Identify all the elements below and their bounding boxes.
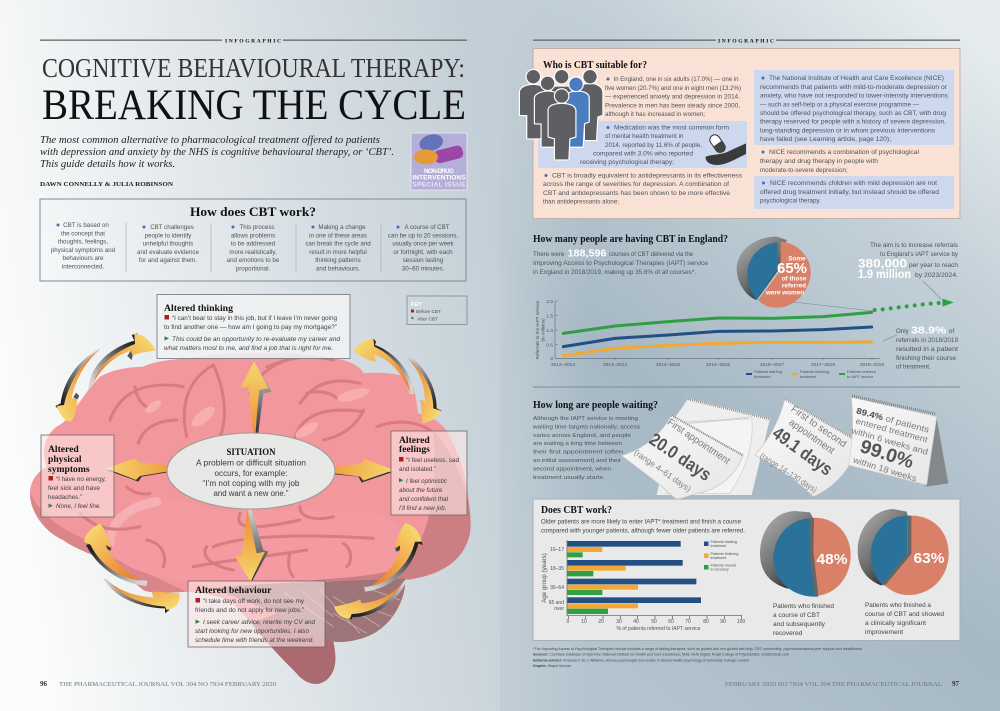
column 2: for and against them. xyxy=(139,257,197,264)
box: altered physical symptoms: None, I feel fine. xyxy=(56,503,101,510)
bar chart: age groups: 90 xyxy=(720,619,726,625)
arrow: thinking to symptoms, lower xyxy=(55,348,100,422)
left section label: INFOGRAPHIC xyxy=(225,38,281,44)
title xyxy=(42,52,466,129)
bar chart: age groups: 20 xyxy=(598,619,604,625)
heading: Who is CBT suitable for? xyxy=(543,60,647,71)
bar chart: age groups xyxy=(541,540,745,632)
description: Older patients are more likely to enter IAPT* treatment and finish a course xyxy=(541,518,741,526)
text: courses delivered: Improving Access to Psychological Therapies (IAPT) service xyxy=(533,260,709,267)
column 2: unhelpful thoughts xyxy=(143,241,193,248)
text: right column: therapy and drug therapy in people with xyxy=(760,158,879,165)
text: right column: moderate-to-severe depression; xyxy=(760,167,848,174)
text: waiting: are waiting a long time between xyxy=(533,441,622,447)
bar chart: age groups: 30 xyxy=(616,619,622,625)
text: right column: should be offered psychological therapy, such as CBT, with drug xyxy=(760,110,947,117)
chart legend xyxy=(746,369,876,379)
right page footer: FEBRUARY 2020 NO 7934 VOL 304 THE PHARMACEUTICAL JOURNAL xyxy=(725,681,942,688)
calendar text: first to second appointment xyxy=(758,404,848,495)
column 4: thinking patterns xyxy=(315,257,361,264)
right page background xyxy=(500,0,1000,711)
text: waiting: Although the IAPT service is meeting xyxy=(533,416,638,422)
calendar text: first appointment: (range 4–61 days) xyxy=(632,447,693,494)
pie caption: improvement: a clinically significant xyxy=(865,620,926,627)
column 5: usually once per week xyxy=(392,241,455,248)
box: altered physical symptoms: feel sick and have xyxy=(48,485,101,492)
box: altered behaviour: schedule time with friends at the weekend. xyxy=(195,637,314,644)
calendar text: first to second appointment: 49.1 days xyxy=(769,423,836,480)
text: right column: NICE recommends a combination of psychological xyxy=(769,149,919,156)
bar chart legend xyxy=(704,540,738,572)
calendar text: first appointment: 20.0 days xyxy=(646,429,715,485)
calendar text: first to second appointment: appointment xyxy=(787,417,836,457)
box: altered behaviour: I seek career advice, rewrite my CV and xyxy=(203,619,316,626)
line chart: referrals: 0 xyxy=(550,356,553,362)
calendar text: treatment within weeks: entered treatment xyxy=(855,416,929,445)
column 5: 30–60 minutes. xyxy=(402,266,444,272)
line chart: referrals: 0.5 xyxy=(546,342,553,348)
chart legend: Patients starting xyxy=(754,369,782,374)
column 3: allows problems xyxy=(231,232,275,239)
bar chart legend: Patients starting xyxy=(710,540,737,544)
right page footer: 97 xyxy=(952,680,960,688)
left page footer: THE PHARMACEUTICAL JOURNAL VOL 304 NO 7934 FEBRUARY 2020 xyxy=(59,681,276,688)
pie: 48% recovered xyxy=(760,511,851,597)
line chart: referrals: 2018–2019 xyxy=(860,362,884,368)
special issue badge xyxy=(411,132,467,190)
column 5: A course of CBT xyxy=(404,224,450,231)
line chart: referrals: 1.0 xyxy=(546,328,553,334)
callout: referral aim: 1.9 million xyxy=(858,269,911,281)
callout: 38.9 percent: 38.9% xyxy=(911,324,947,336)
line chart: referrals: 2015–2016 xyxy=(706,362,730,368)
text: left column: receiving psychological therapy; xyxy=(580,159,674,166)
box: altered thinking: This could be an opportunity to re-evaluate my career and xyxy=(172,336,341,343)
pie: 65% referred were women: were women xyxy=(765,289,804,296)
box: altered thinking: Altered thinking xyxy=(164,303,233,314)
text: left column: Prevalence in men has been steady since 2000, xyxy=(605,102,740,109)
bar chart: age groups: over xyxy=(554,606,564,612)
heading: how long waiting: How long are people waiting? xyxy=(533,400,658,411)
column 4: can break the cycle and xyxy=(305,241,371,248)
bar chart: age groups: 60 xyxy=(668,619,674,625)
chart legend: treatment xyxy=(754,374,771,379)
box: altered feelings: and confident that xyxy=(399,496,448,503)
text: waiting xyxy=(532,416,640,481)
text: left column: CBT is broadly equivalent to antidepressants in its effectiveness xyxy=(552,172,742,180)
left page footer: 96 xyxy=(40,680,48,688)
arrow: symptoms to behaviour, lower xyxy=(103,578,180,613)
text: right column: The National Institute of Health and Care Excellence (NICE) xyxy=(769,75,944,82)
bar chart: age groups: 100 xyxy=(737,619,745,625)
column 3: to be addressed xyxy=(231,241,276,248)
key xyxy=(407,296,467,324)
column 3: This process xyxy=(239,224,275,231)
situation ellipse xyxy=(167,433,335,509)
line chart: referrals: Referrals to the IAPT service xyxy=(535,300,540,359)
column 1: the concept that xyxy=(61,230,105,237)
arrow: left xyxy=(106,458,193,482)
bar chart: age groups: 10 xyxy=(581,619,587,625)
footnotes: Graphic: Wayne McLean xyxy=(533,664,571,668)
column 3: proportional. xyxy=(236,266,270,272)
text: right column: recommends that patients with mild-to-moderate depression or xyxy=(760,84,947,91)
box: altered feelings: Altered xyxy=(399,435,430,446)
calendar text: treatment within weeks: within 6 weeks and xyxy=(849,425,929,457)
text: right column: anxiety, who have not responded to lower-intensity interventions xyxy=(760,93,948,100)
special issue badge: SPECIAL ISSUE xyxy=(412,182,466,188)
box: altered thinking: “I can’t bear to stay in this job, but if I leave I’m never going xyxy=(172,315,338,322)
authors: DAWN CONNELLY & JULIA ROBINSON xyxy=(40,181,173,188)
column 1 xyxy=(51,222,116,270)
box: altered feelings: “I feel useless, sad xyxy=(406,457,460,464)
line chart: referrals: 2014–2015 xyxy=(656,362,680,368)
text: courses delivered: There were xyxy=(533,251,565,258)
line chart: referrals xyxy=(535,281,954,368)
intro text: with depression and anxiety by the NHS is cognitive behavioural therapy, or ‘CBT’. xyxy=(40,147,394,158)
column 2 xyxy=(137,224,200,264)
description xyxy=(541,518,745,534)
text: waiting: second appointment, when xyxy=(533,466,611,472)
bar chart legend: Patients finishing xyxy=(710,552,738,556)
box: altered physical symptoms: physical xyxy=(48,454,82,465)
callout: 38.9 percent: resulted in a patient xyxy=(896,346,958,353)
pie value: 63%: 63% xyxy=(914,550,944,567)
box: altered feelings: and isolated.” xyxy=(399,466,436,473)
text: courses delivered xyxy=(533,248,709,276)
arrow: behaviour to feelings, lower xyxy=(334,578,407,619)
footnotes: Sources: Cochrane Database of Syst Rev; National Institute for Health and Care Excellence; NHS; NHS Digital; Royal College of Psychiatrists; Shutterstock.com xyxy=(533,653,789,657)
column 5: can be up to 20 sessions, xyxy=(388,232,458,239)
text: waiting: varies across England, and people xyxy=(533,433,631,439)
footnotes: Editorial adviser: Amanda C de C Williams, clinical psychologist and reader in clinical health psychology at University College London xyxy=(533,658,749,662)
arrow: thinking to symptoms, upper xyxy=(88,333,156,389)
pie: 63% improved xyxy=(858,509,949,595)
column 2: and evaluate evidence xyxy=(137,249,200,256)
situation ellipse: occurs, for example: xyxy=(214,469,288,478)
text: right column: NICE recommends children with mild depression are not xyxy=(770,180,937,187)
text: right column: offered drug treatment initially, but instead should be offered xyxy=(760,189,940,196)
calendar pages xyxy=(622,396,948,500)
text: left column: Medication was the most common form xyxy=(614,124,729,132)
callout: 38.9 percent xyxy=(896,324,959,370)
arrow: behaviour to feelings, upper xyxy=(364,523,423,592)
bar chart: age groups: 0 xyxy=(567,619,570,625)
column 4: Making a change xyxy=(318,224,366,231)
callout: referral aim: to England’s IAPT service by xyxy=(880,251,959,258)
arrow: symptoms to behaviour, upper xyxy=(84,523,147,586)
callout: 38.9 percent: of treatment. xyxy=(896,364,931,370)
column 3: more realistically, xyxy=(229,249,277,256)
intro text: The most common alternative to pharmacological treatment offered to patients xyxy=(40,135,380,146)
special issue badge: INTERVENTIONS xyxy=(412,174,466,182)
key: KEY xyxy=(411,302,422,308)
panel: does CBT work xyxy=(533,499,960,640)
front page 2 xyxy=(755,398,860,497)
bar chart: age groups: 50 xyxy=(651,619,657,625)
callout: 38.9 percent: finishing their course xyxy=(896,355,957,362)
calendar text: treatment within weeks xyxy=(849,406,930,484)
calendar text: treatment within weeks: within 18 weeks xyxy=(851,454,918,484)
pie caption: improvement xyxy=(865,602,944,636)
series: patients referred xyxy=(563,312,872,333)
text: right column: have failed (see Learning article, page 120); xyxy=(760,136,891,143)
column 1: behaviours are xyxy=(63,255,104,262)
bar chart legend: Patients moved xyxy=(710,564,736,568)
box: altered thinking: what matters most to me, and find a job that is right for me. xyxy=(164,345,333,352)
bar chart: age groups: Age group (years) xyxy=(541,553,548,603)
column 1: physical symptoms and xyxy=(51,247,116,254)
calendar text: first to second appointment: First to second xyxy=(789,404,848,450)
column 2: people to identify xyxy=(145,232,192,239)
bar chart legend: treatment xyxy=(710,544,726,548)
pie caption: recovered: Patients who finished xyxy=(773,603,834,610)
box: altered physical symptoms: symptoms xyxy=(48,464,90,475)
pie: 65% referred were women: 65% xyxy=(777,260,807,277)
title: COGNITIVE BEHAVIOURAL THERAPY: xyxy=(42,52,465,83)
icon: hand with pill xyxy=(706,133,746,165)
column 3: and emotions to be xyxy=(227,257,280,264)
left page background xyxy=(0,0,500,711)
arrows: upper right cycle xyxy=(353,338,442,423)
text: courses delivered: in England in 2018/2019, making up 35.6% of all courses*. xyxy=(533,269,696,276)
text: left column: than antidepressants alone; xyxy=(543,198,619,206)
footnotes xyxy=(533,647,862,668)
arrow: down xyxy=(235,508,268,582)
box: altered behaviour: start looking for new opportunities. I also xyxy=(195,628,310,635)
heading: Does CBT work? xyxy=(541,505,612,516)
target projection dotted arrow xyxy=(873,299,954,312)
bar chart: age groups: 36–64 xyxy=(550,585,564,591)
box: altered feelings xyxy=(391,431,467,515)
text: left column: CBT and antidepressants has been shown to be more effective xyxy=(543,190,731,197)
pie: 65% referred were women: referred xyxy=(782,282,806,289)
text: waiting: an initial assessment) and their xyxy=(533,458,621,464)
pie value: 48%: 48% xyxy=(816,551,848,568)
calendar text: first to second appointment: (range 14–130 days) xyxy=(758,450,819,495)
arrow: feelings to thinking, lower xyxy=(405,353,442,423)
box: altered thinking xyxy=(157,294,350,358)
column 1: thoughts, feelings, xyxy=(58,239,108,246)
arrow: feelings to thinking, upper xyxy=(353,338,414,394)
box: altered feelings: feelings xyxy=(399,444,430,455)
text: left column: five women (20.7%) and one in eight men (13.2%) xyxy=(605,85,741,92)
right section label: INFOGRAPHIC xyxy=(718,38,774,44)
callout: 38.9 percent: of xyxy=(949,328,954,335)
pie: 65% referred were women: Some xyxy=(788,256,806,263)
pie caption: recovered xyxy=(773,603,834,637)
footnotes: *The Improving Access to Psychological Therapies service includes a range of talking therapies, such as guided and non-guided self-help, CBT, counselling, psychoeducational peer support and mindfulness xyxy=(533,647,862,651)
situation ellipse: A problem or difficult situation xyxy=(196,458,306,468)
column 1: interconnected. xyxy=(62,264,104,270)
situation ellipse: SITUATION xyxy=(226,447,276,457)
text: left column: In England, one in six adults (17.0%) — one in xyxy=(614,76,739,83)
column 5: session lasting xyxy=(403,257,444,264)
box: altered thinking: to find another one — how am I going to pay my mortgage?” xyxy=(164,324,337,331)
calendar text: first appointment: First appointment xyxy=(665,417,732,467)
text: left column: although it has increased in women; xyxy=(605,111,705,118)
text: left column: compared with 3.0% who reported xyxy=(593,150,694,158)
text: left column: across the range of severities for depression. A combination of xyxy=(543,181,729,188)
box: altered behaviour: Altered behaviour xyxy=(195,585,272,596)
bar chart: age groups: 18–35 xyxy=(550,566,564,572)
desk calendar xyxy=(917,418,948,487)
box: altered physical symptoms xyxy=(41,435,114,517)
bar chart: age groups: 80 xyxy=(703,619,709,625)
arrows: situation to outcomes xyxy=(106,362,394,582)
text: left column: of mental health treatment in xyxy=(605,133,684,140)
pie: 65% referred were women xyxy=(737,237,811,308)
text: right column: psychological therapy. xyxy=(760,198,821,204)
bar chart: age groups: 40 xyxy=(633,619,639,625)
chart legend: to IAPT service xyxy=(847,374,873,379)
pie caption: recovered: and subsequently xyxy=(773,621,826,628)
pie caption: improvement: improvement xyxy=(865,629,903,636)
box: altered physical symptoms: headaches.” xyxy=(48,494,82,501)
arrow: up xyxy=(240,362,272,440)
series: patients finishing xyxy=(563,342,872,356)
bar chart: age groups: 70 xyxy=(685,619,691,625)
bar chart: age groups: 16–17 xyxy=(550,547,564,553)
box: altered behaviour: friends and do not apply for new jobs.” xyxy=(195,607,304,614)
column 5 xyxy=(388,224,458,272)
line chart: referrals: 1.5 xyxy=(546,314,553,320)
text: waiting: their first appointment (often xyxy=(533,450,623,456)
column 4: and behaviours. xyxy=(316,266,360,272)
column 4: result in more helpful xyxy=(309,249,367,256)
line chart: referrals: 2.0 xyxy=(546,299,553,305)
calendar text: treatment within weeks: 99.0% xyxy=(857,436,916,473)
pie caption: improvement: Patients who finished a xyxy=(865,602,931,609)
column 1: CBT is based on xyxy=(63,222,109,229)
column 2: CBT challenges xyxy=(150,224,194,231)
callout: referral aim: 380,000 xyxy=(858,258,907,270)
special issue badge: NON-DRUG xyxy=(424,168,454,175)
column 4: in one of these areas xyxy=(309,232,367,239)
box: altered behaviour: “I take days off work, do not see my xyxy=(203,598,305,605)
bar chart: age groups: 65 and xyxy=(549,600,564,606)
box: altered physical symptoms: “I have no energy, xyxy=(56,476,106,483)
column 5: or fortnight, with each xyxy=(393,249,453,256)
callout: referral aim xyxy=(858,242,959,281)
box: altered physical symptoms: Altered xyxy=(48,444,79,455)
key: Before CBT xyxy=(416,309,441,315)
text: right column: — such as self-help or a physical exercise programme — xyxy=(760,101,920,108)
chart legend: treatment xyxy=(800,374,817,379)
callout: 38.9 percent: Only xyxy=(896,328,910,335)
arrows: upper left cycle xyxy=(55,333,156,422)
key: After CBT xyxy=(417,316,438,322)
bar chart: age groups: % of patients referred to IAPT service xyxy=(616,626,701,632)
calendar text: first appointment xyxy=(632,417,732,494)
line chart: referrals: 2013–2014 xyxy=(603,362,627,368)
column 4 xyxy=(305,224,371,272)
heading: How does CBT work? xyxy=(190,205,316,219)
pie: 65% referred were women: of those xyxy=(782,275,807,282)
text: right column xyxy=(760,75,948,204)
panel: who is CBT suitable for xyxy=(520,48,960,218)
text: courses delivered: courses of CBT delivered via the xyxy=(609,251,694,258)
situation ellipse: “I’m not coping with my job xyxy=(202,479,300,488)
column 3 xyxy=(227,224,280,272)
icon: group of people xyxy=(520,70,602,159)
panel: how does CBT work xyxy=(40,199,466,281)
heading: how many people: How many people are having CBT in England? xyxy=(533,234,728,245)
callout: referral aim: per year to reach xyxy=(909,262,959,269)
pie caption: improvement: course of CBT and showed xyxy=(865,611,944,618)
chart legend: Patients referred xyxy=(847,369,876,374)
callout: referral aim: by 2023/2024. xyxy=(915,272,958,279)
pie caption: recovered: recovered xyxy=(773,630,803,637)
chart legend: Patients finishing xyxy=(800,369,829,374)
arrows: lower right cycle xyxy=(334,523,423,619)
text: left column xyxy=(543,76,742,206)
callout: referral aim: The aim is to increase referrals xyxy=(870,242,958,249)
bar chart legend: treatment xyxy=(710,556,726,560)
arrow: right xyxy=(308,459,394,483)
text: right column: therapy reserved for people with a history of severe depression, xyxy=(760,119,946,126)
description: compared with younger patients, although fewer older patients are referred. xyxy=(541,528,745,534)
text: waiting: waiting time targets nationally, access xyxy=(532,424,640,430)
line chart: referrals: 2012–2013 xyxy=(551,362,575,368)
callout: 38.9 percent: referrals in 2018/2019 xyxy=(896,337,959,344)
arrows: lower left cycle xyxy=(84,523,180,613)
line chart: referrals: 2016–2017 xyxy=(760,362,784,368)
text: left column: — experienced anxiety and depression in 2014. xyxy=(605,94,740,101)
box: altered behaviour xyxy=(188,581,325,647)
text: left column: 2014, reported by 11.6% of people, xyxy=(605,142,702,149)
line chart: referrals: 2017–2018 xyxy=(811,362,835,368)
box: altered feelings: I’ll find a new job. xyxy=(399,505,446,512)
line chart: referrals: (in millions) xyxy=(540,318,546,342)
calendar text: treatment within weeks: 89.4% of patients xyxy=(855,406,930,435)
bar chart legend: to recovery xyxy=(710,568,729,572)
illustration: brain xyxy=(30,353,471,684)
back page xyxy=(657,398,770,495)
title: BREAKING THE CYCLE xyxy=(42,82,466,129)
intro text xyxy=(40,135,394,170)
series: patients starting xyxy=(563,327,872,347)
front page 1 xyxy=(622,415,743,500)
box: altered feelings: about the future xyxy=(399,487,443,494)
intro text: This guide details how it works. xyxy=(40,159,175,170)
box: altered feelings: I feel optimistic xyxy=(406,478,448,485)
text: waiting: treatment usually starts. xyxy=(533,475,605,481)
text: courses delivered: 188,596 xyxy=(568,248,607,260)
pie caption: recovered: a course of CBT xyxy=(773,612,820,619)
text: right column: long-standing depression or in whom previous interventions xyxy=(760,127,935,134)
situation ellipse: and want a new one.” xyxy=(214,489,289,498)
